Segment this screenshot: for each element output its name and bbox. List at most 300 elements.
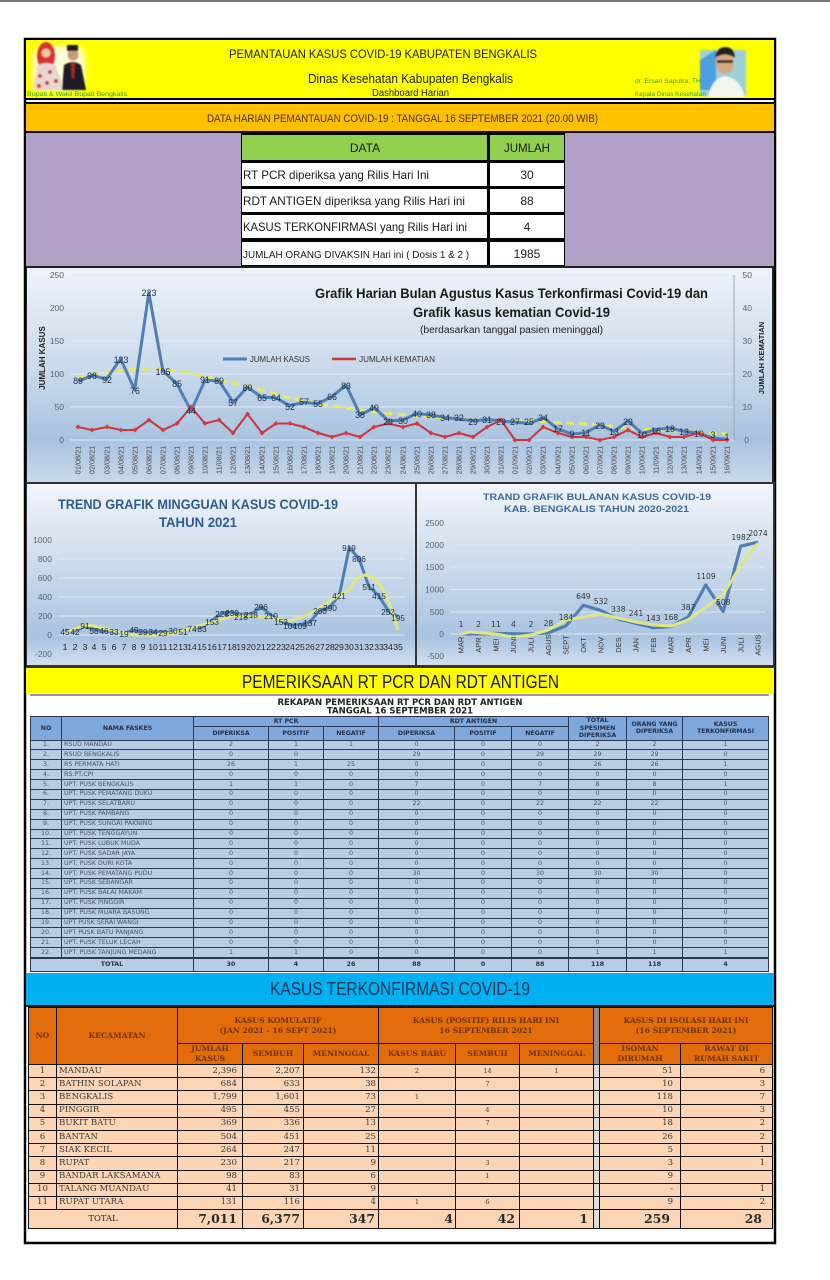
data labels: 30 [168, 626, 178, 636]
axis values: 1000 [33, 535, 52, 545]
table: RT PCR and RDT antigen recap: 0 [349, 771, 353, 778]
table: RT PCR and RDT antigen recap: 4 [723, 961, 728, 968]
data labels: kasus: 89 [214, 376, 224, 386]
date axis labels: 04/08/21 [116, 446, 126, 474]
table: RT PCR and RDT antigen recap: 0 [653, 939, 657, 946]
table: RT PCR and RDT antigen recap: 20. [41, 929, 51, 936]
date axis labels: 30/08/21 [482, 446, 492, 474]
table: confirmed cases by district: 73 [365, 1092, 376, 1102]
table: confirmed cases by district [28, 1007, 773, 1229]
data labels: 649 [576, 592, 591, 601]
table: confirmed cases by district: 6 [485, 1198, 490, 1206]
table: confirmed cases by district: 31 [289, 1184, 300, 1194]
table: RT PCR and RDT antigen recap: 0 [653, 919, 657, 926]
table: RT PCR and RDT antigen recap: 2 [229, 741, 233, 748]
data labels: kasus: 85 [172, 379, 182, 389]
table: RT PCR and RDT antigen recap: 0 [414, 879, 419, 886]
data labels: 4 [511, 620, 516, 629]
caption: doctor name: dr. Ersan Saputra, TH [635, 79, 701, 85]
table: RT PCR and RDT antigen recap: 19. [41, 919, 51, 926]
table: confirmed cases by district: ISOMAN [621, 1044, 659, 1053]
table: confirmed cases by district: 1 [554, 1067, 559, 1075]
date axis labels: 28/08/21 [454, 446, 464, 474]
axis values: -500 [427, 651, 444, 661]
month axis labels: MEI [492, 638, 500, 652]
week axis labels: 33 [374, 642, 384, 652]
axis: right values: 30 [743, 336, 752, 346]
data labels: kasus: 32 [454, 413, 464, 423]
data labels: 45 [60, 627, 70, 637]
table: RT PCR and RDT antigen recap: TOTAL [101, 961, 123, 968]
data labels: 11 [491, 620, 501, 629]
table: RT PCR and RDT antigen recap: 0 [653, 830, 657, 837]
table: confirmed cases by district: 2,207 [275, 1066, 300, 1076]
table: confirmed cases by district: 28 [745, 1211, 762, 1226]
table: RT PCR and RDT antigen recap: 118 [591, 961, 604, 968]
table: RT PCR and RDT antigen recap: 16. [41, 889, 51, 896]
table: confirmed cases by district: 1 [415, 1198, 419, 1206]
trend line [65, 575, 398, 635]
table: confirmed cases by district: 2 [760, 1132, 765, 1142]
table: RT PCR and RDT antigen recap: 0 [481, 850, 485, 857]
table: confirmed cases by district: KASUS BARU [388, 1049, 446, 1058]
table: RT PCR and RDT antigen recap: 0 [414, 850, 419, 857]
table: RT PCR and RDT antigen recap: RS PERMATA HATI [64, 761, 120, 768]
table: RT PCR and RDT antigen recap: 0 [349, 810, 353, 817]
table: RT PCR and RDT antigen recap: 0 [349, 879, 353, 886]
table: RT PCR and RDT antigen recap: 0 [349, 919, 353, 926]
table: confirmed cases by district: 25 [365, 1132, 376, 1142]
table: confirmed cases by district: 11 [365, 1145, 376, 1155]
week axis labels: 2 [73, 642, 78, 652]
date axis labels: 19/08/21 [328, 446, 336, 474]
table: RT PCR and RDT antigen recap: RT PCR [274, 718, 298, 725]
table: confirmed cases by district: SIAK KECIL [59, 1145, 112, 1155]
table: confirmed cases by district: 347 [349, 1211, 375, 1226]
week axis labels: 13 [178, 642, 188, 652]
table: RT PCR and RDT antigen recap: 0 [294, 899, 298, 906]
date axis labels: 14/08/21 [258, 446, 266, 474]
data labels: kasus: 80 [243, 383, 252, 393]
week axis labels: 7 [122, 642, 127, 652]
data labels: 421 [332, 591, 346, 601]
data labels: kasus: 66 [327, 392, 337, 402]
data labels: kasus: 65 [257, 393, 267, 403]
table: confirmed cases by district: 217 [284, 1158, 300, 1168]
data labels: kasus: 44 [186, 406, 196, 416]
table: RT PCR and RDT antigen recap: 30 [651, 870, 659, 877]
table: RT PCR and RDT antigen recap: 0 [349, 909, 353, 916]
table: confirmed cases by district: 118 [657, 1092, 673, 1102]
table: RT PCR and RDT antigen recap: 0 [229, 840, 233, 847]
data labels: 137 [303, 618, 317, 628]
table: RT PCR and RDT antigen recap: 7. [43, 800, 49, 807]
table: RT PCR and RDT antigen recap: 1. [43, 741, 49, 748]
table: RT PCR and RDT antigen recap: 0 [538, 840, 542, 847]
month axis labels: MEI [702, 638, 710, 652]
table: confirmed cases by district: 42 [498, 1211, 515, 1226]
chart title: TAHUN 2021 [159, 515, 237, 530]
table: RT PCR and RDT antigen recap: 1 [229, 949, 233, 956]
month axis labels: APR [474, 637, 483, 653]
chart title: Grafik Harian Bulan Agustus Kasus Terkonfirmasi Covid-19 dan [315, 285, 708, 301]
axis values: 400 [38, 592, 52, 602]
table: RT PCR and RDT antigen recap: 0 [538, 899, 542, 906]
axis: left values [50, 270, 64, 445]
data labels: kasus: 34 [538, 413, 548, 423]
table: RT PCR and RDT antigen recap: 0 [229, 810, 233, 817]
table: RT PCR and RDT antigen recap: 0 [294, 800, 298, 807]
table: RT PCR and RDT antigen recap: 0 [653, 929, 657, 936]
table: RT PCR and RDT antigen recap: 30 [594, 870, 602, 877]
month axis labels: MAR [666, 636, 676, 653]
table: RT PCR and RDT antigen recap: 0 [653, 899, 657, 906]
table: RT PCR and RDT antigen recap: 0 [481, 870, 485, 877]
table title: TANGGAL 16 SEPTEMBER 2021 [327, 706, 473, 716]
table: confirmed cases by district: 4 [444, 1211, 453, 1226]
table: RT PCR and RDT antigen recap: 12. [41, 850, 51, 857]
table: confirmed cases by district: 336 [284, 1118, 300, 1128]
data labels: kasus: 38 [426, 410, 436, 420]
heading: pemeriksaan: PEMERIKSAAN RT PCR DAN RDT ANTIGEN [242, 672, 559, 692]
dashboard label: Dashboard Harian [372, 88, 449, 99]
axis values: -200 [35, 649, 52, 659]
icon: photo of health office head [700, 47, 746, 97]
table: confirmed cases by district: KASUS DI ISOLASI HARI INI [624, 1016, 748, 1024]
table: RT PCR and RDT antigen recap: RSUD MANDAU [64, 741, 112, 748]
table: RT PCR and RDT antigen recap: 0 [538, 771, 542, 778]
table: RT PCR and RDT antigen recap: 0 [653, 879, 657, 886]
table: confirmed cases by district: 7,011 [198, 1211, 237, 1226]
table: RT PCR and RDT antigen recap: DIPERIKSA [636, 728, 673, 735]
table: RT PCR and RDT antigen recap: 0 [229, 830, 233, 837]
panel: daily data table: JUMLAH [504, 143, 550, 155]
data labels: kasus: 16 [651, 426, 661, 436]
month axis labels: JAN [632, 638, 640, 652]
table: RT PCR and RDT antigen recap: 0 [596, 850, 600, 857]
table: confirmed cases by district: BANTAN [59, 1132, 98, 1142]
data labels: 239 [225, 608, 239, 618]
table: RT PCR and RDT antigen recap: 17. [41, 899, 51, 906]
table: RT PCR and RDT antigen recap: 0 [596, 820, 600, 827]
date axis labels: 10/08/21 [200, 446, 210, 474]
data labels: kasus: 13 [679, 427, 689, 437]
table: RT PCR and RDT antigen recap: 0 [294, 850, 298, 857]
table: RT PCR and RDT antigen recap: UPT PUSK SERAI WANGI [64, 919, 139, 926]
heading: kasus terkonfirmasi [26, 973, 774, 1007]
data labels: kasus: 83 [341, 381, 351, 391]
table: RT PCR and RDT antigen recap: 0 [653, 810, 657, 817]
axis: right values [743, 270, 752, 445]
table: confirmed cases by district: 1 [760, 1158, 765, 1168]
axis: left values: 50 [55, 402, 64, 412]
table: RT PCR and RDT antigen recap: NAMA FASKES [103, 724, 152, 732]
week axis labels: 30 [344, 642, 354, 652]
table: confirmed cases by district: 3 [760, 1105, 765, 1115]
data labels: 49 [129, 625, 139, 635]
date axis labels: 22/08/21 [370, 446, 378, 474]
date axis labels: 01/08/21 [74, 446, 82, 474]
table: RT PCR and RDT antigen recap: RS.PT.CPI [64, 771, 93, 778]
panel: daily data table: JUMLAH ORANG DIVAKSIN Hari ini ( Dosis 1 & 2 ) [243, 250, 469, 261]
table: confirmed cases by district: 131 [221, 1197, 237, 1207]
table: confirmed cases by district: (JAN 2021 - 16 SEPT 2021) [220, 1026, 336, 1034]
table: RT PCR and RDT antigen recap: 0 [229, 929, 233, 936]
chart: monthly trend [415, 482, 775, 668]
data labels: 34 [148, 627, 158, 637]
week axis labels: 18 [227, 642, 237, 652]
data labels: 195 [391, 613, 405, 623]
data labels: 290 [323, 603, 337, 613]
date axis labels: 20/08/21 [342, 446, 350, 474]
week axis labels: 11 [159, 642, 168, 652]
month axis labels: JULI [526, 637, 536, 653]
table: confirmed cases by district: 38 [365, 1079, 376, 1089]
table: RT PCR and RDT antigen recap: 0 [229, 909, 233, 916]
data labels: 153 [274, 617, 288, 627]
data labels: 806 [352, 554, 366, 564]
axis values: 1500 [425, 562, 444, 572]
date axis labels: 10/09/21 [638, 446, 646, 474]
date axis labels: 15/08/21 [272, 446, 280, 474]
table: RT PCR and RDT antigen recap: 0 [414, 909, 419, 916]
panel: daily data table: RDT ANTIGEN diperiksa yang Rilis Hari ini [243, 194, 465, 208]
table: confirmed cases by district: RUMAH SAKIT [694, 1054, 759, 1063]
table: RT PCR and RDT antigen recap: 0 [294, 939, 298, 946]
week axis labels: 24 [285, 642, 295, 652]
week axis labels: 26 [305, 642, 315, 652]
week axis labels: 8 [132, 642, 137, 652]
table: RT PCR and RDT antigen recap: 0 [414, 840, 419, 847]
panel: daily data table: 88 [520, 194, 534, 208]
date axis labels: 25/08/21 [412, 446, 422, 474]
table: RT PCR and RDT antigen recap: 0 [724, 830, 728, 837]
table: confirmed cases by district: 264 [221, 1145, 237, 1155]
data labels: kasus: 29 [383, 417, 393, 427]
table: confirmed cases by district: 2 [415, 1067, 419, 1075]
table: RT PCR and RDT antigen recap: 0 [294, 889, 298, 896]
table: confirmed cases by district: BUKIT BATU [59, 1118, 116, 1128]
table: RT PCR and RDT antigen recap: 0 [349, 949, 353, 956]
table: RT PCR and RDT antigen recap: 0 [724, 771, 728, 778]
table: RT PCR and RDT antigen recap: 0 [653, 909, 657, 916]
panel: daily data table: 30 [520, 168, 534, 182]
data labels: kasus: 17 [553, 424, 563, 434]
date axis labels: 26/08/21 [426, 446, 436, 474]
table: RT PCR and RDT antigen recap: UPT. PUSK TENGGAYUN [64, 830, 137, 837]
table: RT PCR and RDT antigen recap: 0 [349, 790, 353, 797]
table: RT PCR and RDT antigen recap: 26 [347, 961, 355, 968]
table: RT PCR and RDT antigen recap: POSITIF [282, 730, 310, 737]
table: RT PCR and RDT antigen recap: 0 [349, 939, 353, 946]
panel: date banner [26, 104, 774, 133]
table: RT PCR and RDT antigen recap: 1 [724, 949, 728, 956]
table: confirmed cases by district: 5 [668, 1145, 673, 1155]
data labels: 42 [70, 627, 80, 637]
table: RT PCR and RDT antigen recap: 0 [724, 899, 728, 906]
table: RT PCR and RDT antigen recap: 0 [481, 860, 485, 867]
table: RT PCR and RDT antigen recap: 0 [294, 870, 298, 877]
table: RT PCR and RDT antigen recap: 0 [349, 840, 353, 847]
month axis labels: JUNI [509, 637, 518, 653]
date axis labels: 12/08/21 [228, 446, 238, 474]
table: RT PCR and RDT antigen recap: UPT. PUSK TANJUNG MEDANG [64, 949, 157, 956]
data labels: 29 [158, 628, 168, 638]
table: RT PCR and RDT antigen recap: 0 [724, 751, 728, 758]
table: confirmed cases by district: KASUS KOMULATIF [235, 1016, 321, 1024]
table: RT PCR and RDT antigen recap: 0 [229, 790, 233, 797]
table: RT PCR and RDT antigen recap: 0 [724, 790, 728, 797]
panel: daily data table: 4 [524, 220, 531, 234]
week axis labels [63, 642, 403, 652]
icon: photo of regent and deputy [33, 42, 86, 90]
table: RT PCR and RDT antigen recap: 0 [229, 820, 233, 827]
table: confirmed cases by district: 230 [221, 1158, 237, 1168]
data labels: 511 [362, 582, 376, 592]
table: confirmed cases by district: MENINGGAL [313, 1049, 369, 1058]
table: RT PCR and RDT antigen recap: 0 [414, 949, 419, 956]
date axis labels: 05/08/21 [130, 446, 140, 474]
table: confirmed cases by district: BANDAR LAKSAMANA [59, 1171, 160, 1181]
data labels: 218 [244, 610, 258, 620]
table: RT PCR and RDT antigen recap: UPT. PUSK SADAR JAYA [64, 850, 135, 857]
table: confirmed cases by district: 11 [37, 1197, 48, 1207]
table: RT PCR and RDT antigen recap: 0 [414, 830, 419, 837]
table: RT PCR and RDT antigen recap: 0 [349, 860, 353, 867]
date axis labels: 06/09/21 [582, 446, 590, 474]
table: RT PCR and RDT antigen recap: 0 [481, 810, 485, 817]
table: confirmed cases by district: 684 [221, 1079, 237, 1089]
data labels: kasus: 1 [725, 432, 730, 442]
table: confirmed cases by district: 455 [284, 1105, 300, 1115]
table: RT PCR and RDT antigen recap: 0 [724, 810, 728, 817]
table: RT PCR and RDT antigen recap: 15. [41, 879, 51, 886]
data labels: 83 [197, 624, 207, 634]
table: RT PCR and RDT antigen recap: 0 [414, 820, 419, 827]
legend [223, 355, 435, 364]
table: confirmed cases by district: KASUS (POSITIF) RILIS HARI INI [413, 1016, 559, 1024]
data labels: kasus: 57 [299, 397, 309, 407]
table: RT PCR and RDT antigen recap: 9. [43, 820, 49, 827]
table: RT PCR and RDT antigen recap: 0 [538, 820, 542, 827]
axis: right values: 50 [743, 270, 752, 280]
table: confirmed cases by district: 132 [360, 1066, 376, 1076]
table: RT PCR and RDT antigen recap: 0 [653, 860, 657, 867]
table: RT PCR and RDT antigen recap: 0 [724, 870, 728, 877]
table: RT PCR and RDT antigen recap: 0 [294, 830, 298, 837]
table: RT PCR and RDT antigen recap: 0 [414, 919, 419, 926]
table: RT PCR and RDT antigen recap: 1 [349, 741, 353, 748]
week axis labels: 25 [295, 642, 305, 652]
data labels: kasus: 92 [102, 375, 112, 385]
data labels: kasus: 29 [468, 417, 478, 427]
table: confirmed cases by district: 1 [485, 1172, 490, 1180]
month axis labels: OKT [579, 637, 588, 653]
data labels [459, 529, 768, 629]
table: RT PCR and RDT antigen recap: 1 [724, 780, 728, 788]
panel: daily data table: KASUS TERKONFIRMASI yang Rilis Hari ini [243, 220, 467, 234]
date axis labels: 09/09/21 [624, 446, 632, 474]
table: confirmed cases by district: 27 [365, 1105, 376, 1115]
axis values: 0 [47, 630, 52, 640]
table: RT PCR and RDT antigen recap: 0 [596, 919, 600, 926]
table: RT PCR and RDT antigen recap: 1 [724, 761, 728, 768]
table: RT PCR and RDT antigen recap: 0 [229, 889, 233, 896]
table: RT PCR and RDT antigen recap: 0 [481, 919, 485, 926]
table: RT PCR and RDT antigen recap: RSUD BENGKALIS [64, 751, 119, 758]
table: RT PCR and RDT antigen recap: 22 [651, 800, 659, 807]
data labels: 532 [594, 597, 608, 606]
axis: left values: 150 [50, 336, 64, 346]
date axis labels: 24/08/21 [398, 446, 408, 474]
table: RT PCR and RDT antigen recap: 0 [414, 899, 419, 906]
week axis labels: 28 [325, 642, 335, 652]
table: RT PCR and RDT antigen recap: 0 [538, 810, 542, 817]
data labels: kasus: 18 [665, 424, 675, 434]
date axis labels: 16/08/21 [286, 446, 294, 474]
date axis labels: 09/08/21 [186, 446, 196, 474]
table: RT PCR and RDT antigen recap: 11. [41, 840, 51, 847]
table: RT PCR and RDT antigen recap: 22. [41, 949, 51, 956]
table: RT PCR and RDT antigen recap: 0 [538, 741, 542, 748]
table: RT PCR and RDT antigen recap: 22 [412, 800, 421, 807]
table: RT PCR and RDT antigen recap: 0 [349, 889, 353, 896]
table: RT PCR and RDT antigen recap: 0 [481, 961, 485, 968]
table: confirmed cases by district: 26 [662, 1132, 673, 1142]
table: confirmed cases by district: TALANG MUANDAU [59, 1184, 149, 1194]
table: RT PCR and RDT antigen recap: 0 [596, 929, 600, 936]
table: RT PCR and RDT antigen recap: 0 [294, 771, 298, 778]
table: RT PCR and RDT antigen recap: 0 [538, 949, 542, 956]
data labels: 919 [342, 543, 356, 553]
week axis labels: 14 [187, 642, 197, 652]
date axis labels [74, 446, 732, 474]
table: RT PCR and RDT antigen recap: 88 [536, 961, 544, 968]
table: RT PCR and RDT antigen recap: 0 [653, 771, 657, 778]
table: RT PCR and RDT antigen recap: 0 [414, 771, 419, 778]
date axis labels: 16/09/21 [722, 446, 732, 474]
date axis labels: 27/08/21 [440, 446, 450, 474]
table: RT PCR and RDT antigen recap: 26 [651, 761, 659, 768]
table: RT PCR and RDT antigen recap: 0 [229, 850, 233, 857]
data labels: 184 [559, 613, 573, 622]
axis: right values: 20 [743, 369, 752, 379]
date axis labels: 18/08/21 [314, 446, 322, 474]
data labels: 241 [629, 609, 643, 618]
data labels: 252 [381, 607, 395, 617]
table: RT PCR and RDT antigen recap: 0 [349, 820, 353, 827]
axis: left values: 100 [50, 369, 64, 379]
table: confirmed cases by district: (16 SEPTEMBER 2021) [636, 1026, 736, 1034]
table: confirmed cases by district: 2,396 [212, 1066, 237, 1076]
month axis labels: MAR [456, 636, 466, 653]
week axis labels: 12 [168, 642, 178, 652]
table: RT PCR and RDT antigen recap: 0 [653, 790, 657, 797]
date axis labels: 07/08/21 [158, 446, 168, 474]
date axis labels: 15/09/21 [708, 446, 718, 474]
data labels: 2 [476, 620, 481, 629]
date axis labels: 05/09/21 [568, 446, 576, 474]
table: RT PCR and RDT antigen recap: 0 [653, 889, 657, 896]
table: RT PCR and RDT antigen recap: 0 [724, 929, 728, 936]
week axis labels: 5 [102, 642, 107, 652]
chart title: KAB. BENGKALIS TAHUN 2020-2021 [504, 504, 690, 515]
table: RT PCR and RDT antigen recap: 2. [43, 751, 49, 758]
table: RT PCR and RDT antigen recap: 0 [481, 741, 485, 748]
table: confirmed cases by district: 247 [284, 1145, 300, 1155]
table: RT PCR and RDT antigen recap: 0 [538, 879, 542, 886]
table: RT PCR and RDT antigen recap: 0 [596, 840, 600, 847]
